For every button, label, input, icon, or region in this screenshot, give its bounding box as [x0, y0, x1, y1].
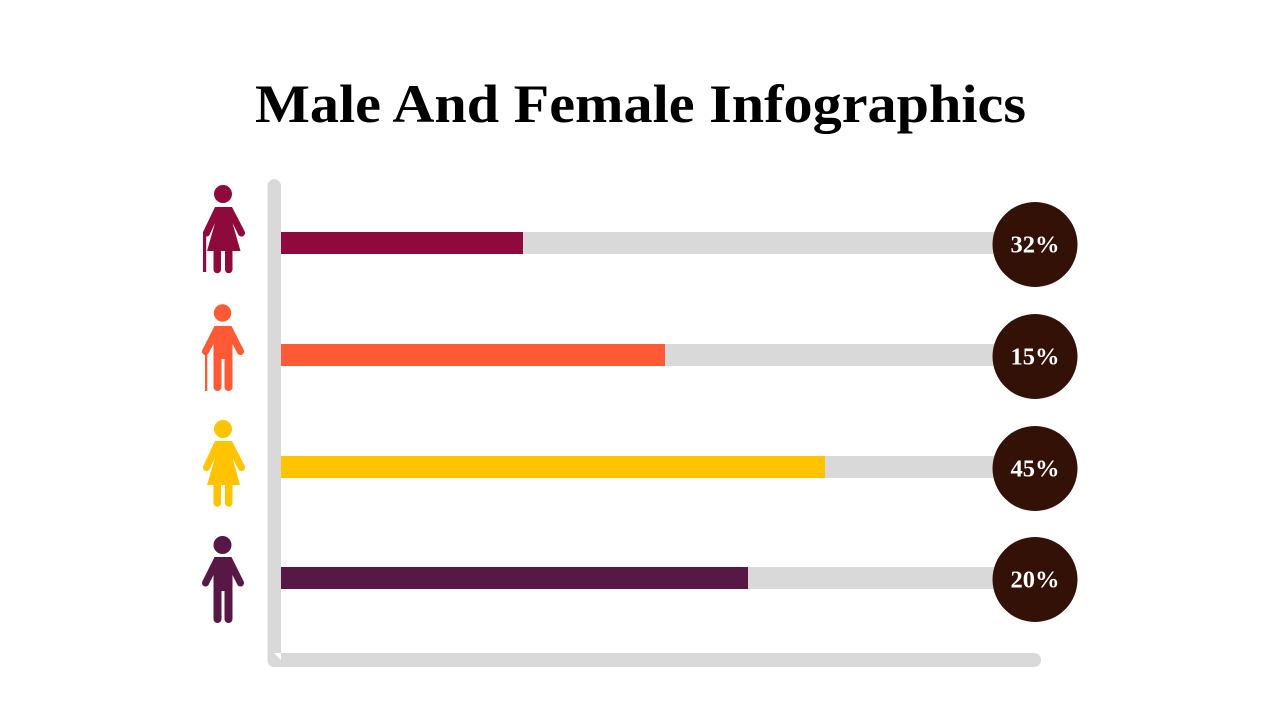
bar row: 45% [281, 426, 1078, 511]
bar row: 20% [281, 537, 1078, 622]
chart axes [268, 179, 1041, 667]
icon: elderly man with cane [202, 304, 244, 391]
bar row: 32% [281, 202, 1078, 287]
icon: elderly woman with cane [203, 185, 245, 273]
icon: man [202, 536, 244, 623]
bar row: 15% [281, 314, 1078, 399]
bar row: 15%: 15% [1010, 344, 1060, 370]
title: Male And Female Infographics [255, 74, 1026, 134]
bar row: 32%: 32% [1010, 232, 1060, 258]
chart: horizontal percentage bars [268, 179, 1078, 667]
bar row: 45%: 45% [1010, 456, 1060, 482]
bar row: 20%: 20% [1010, 566, 1060, 594]
icon: woman [203, 420, 245, 507]
